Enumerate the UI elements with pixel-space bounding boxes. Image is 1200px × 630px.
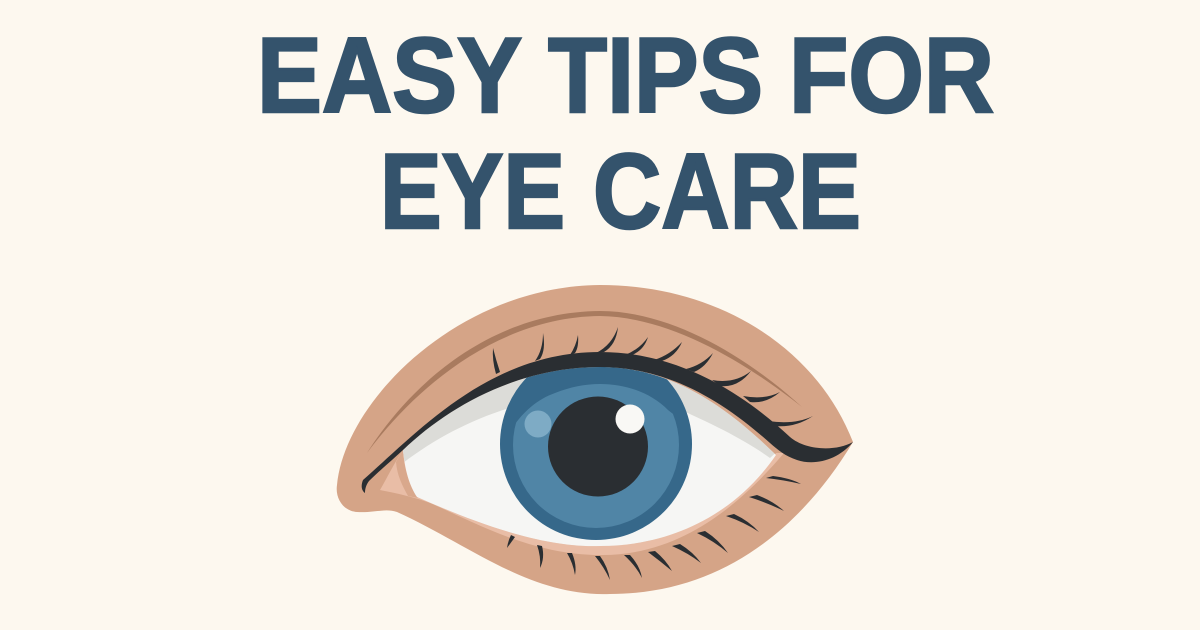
iris light spot xyxy=(524,410,552,438)
iris xyxy=(500,348,692,540)
title: EYE xyxy=(380,131,565,251)
upper lashes xyxy=(493,327,813,426)
lower lid rim and tear duct xyxy=(380,450,784,555)
title: FOR xyxy=(789,15,994,135)
title: TIPS xyxy=(548,15,763,135)
infographic canvas xyxy=(262,36,994,594)
eyelid skin xyxy=(337,285,853,594)
inner iris xyxy=(513,384,679,528)
pupil xyxy=(548,396,648,496)
sclera xyxy=(403,367,776,546)
eye illustration xyxy=(337,285,853,594)
title: CARE xyxy=(593,131,861,251)
eyeliner xyxy=(362,352,853,493)
lower lashes xyxy=(507,476,801,580)
upper eyelid crease xyxy=(367,311,802,453)
pupil highlight xyxy=(616,404,644,434)
title: EASY xyxy=(257,15,522,135)
lid shadow on sclera xyxy=(403,374,774,462)
title xyxy=(257,15,994,251)
